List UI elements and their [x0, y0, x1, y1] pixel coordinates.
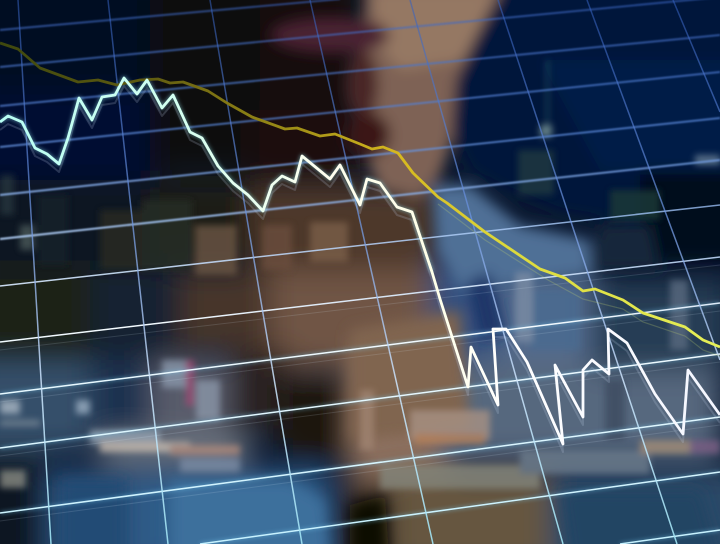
- chart: glow of white line: [0, 78, 432, 272]
- grid: sharper lower horizontal lines: [0, 205, 720, 544]
- background: blurred city buildings: [0, 60, 720, 489]
- grid: perspective horizontal lines: [0, 0, 720, 239]
- chart: yellow trend line: [0, 43, 720, 347]
- grid: faint reflected lines: [0, 265, 720, 521]
- chart: shadow of white line: [0, 86, 720, 452]
- grid: soft glow under lower lines: [0, 303, 720, 544]
- chart: shadow of yellow line: [438, 204, 720, 356]
- chart: white price line: [0, 78, 720, 444]
